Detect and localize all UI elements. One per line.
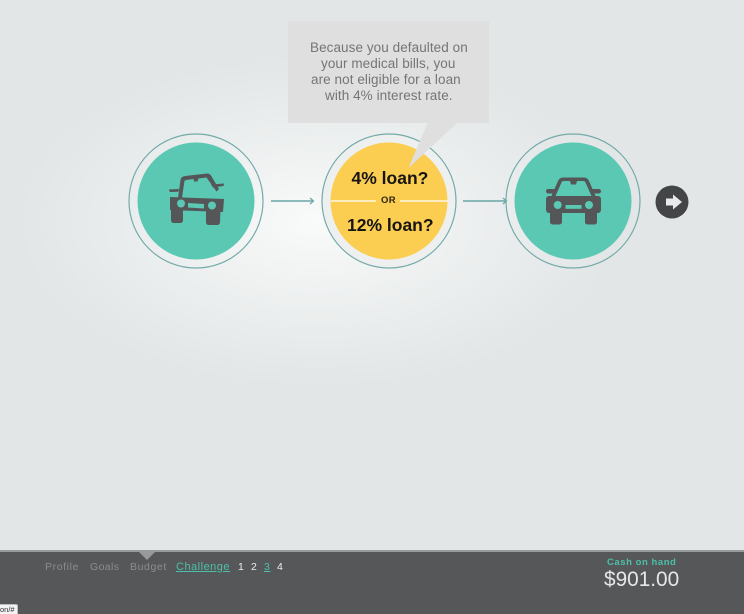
- next button: [656, 186, 688, 218]
- callout text: your medical bills, you: [321, 56, 455, 71]
- url status tooltip: on/#: [0, 605, 15, 614]
- option separator: OR: OR: [381, 195, 396, 206]
- callout text: with 4% interest rate.: [325, 88, 453, 103]
- icon: damaged car: [169, 174, 224, 225]
- callout text: [310, 40, 468, 103]
- callout pointer: [408, 122, 458, 168]
- nav: Goals: Goals: [90, 561, 119, 573]
- nav: Budget: Budget: [130, 561, 167, 573]
- step 3 active: 3: [264, 561, 270, 573]
- option: 4% loan: 4% loan?: [352, 168, 428, 188]
- arrow: second to third step: [463, 198, 506, 204]
- bottom navigation bar: [0, 550, 744, 614]
- callout text: Because you defaulted on: [310, 40, 468, 55]
- callout text box: [288, 21, 489, 123]
- callout text: are not eligible for a loan: [311, 72, 461, 87]
- active section marker: [139, 552, 155, 560]
- icon: car: [546, 178, 601, 224]
- divider: [331, 200, 448, 202]
- arrow: first to second step: [271, 198, 314, 204]
- step 1: 1: [238, 561, 244, 573]
- step circle: damaged car: [129, 134, 263, 268]
- cash label: Cash on hand: [607, 557, 676, 568]
- nav: Profile: Profile: [45, 561, 79, 573]
- step 4: 4: [277, 561, 283, 573]
- option: 12% loan: 12% loan?: [347, 215, 434, 235]
- step 2: 2: [251, 561, 257, 573]
- cash amount: $901.00: [604, 568, 679, 591]
- nav: Challenge: Challenge: [176, 561, 230, 573]
- step circle: repaired car: [506, 134, 640, 268]
- icon: right arrow: [666, 194, 682, 210]
- step circle: loan choice: [322, 134, 456, 268]
